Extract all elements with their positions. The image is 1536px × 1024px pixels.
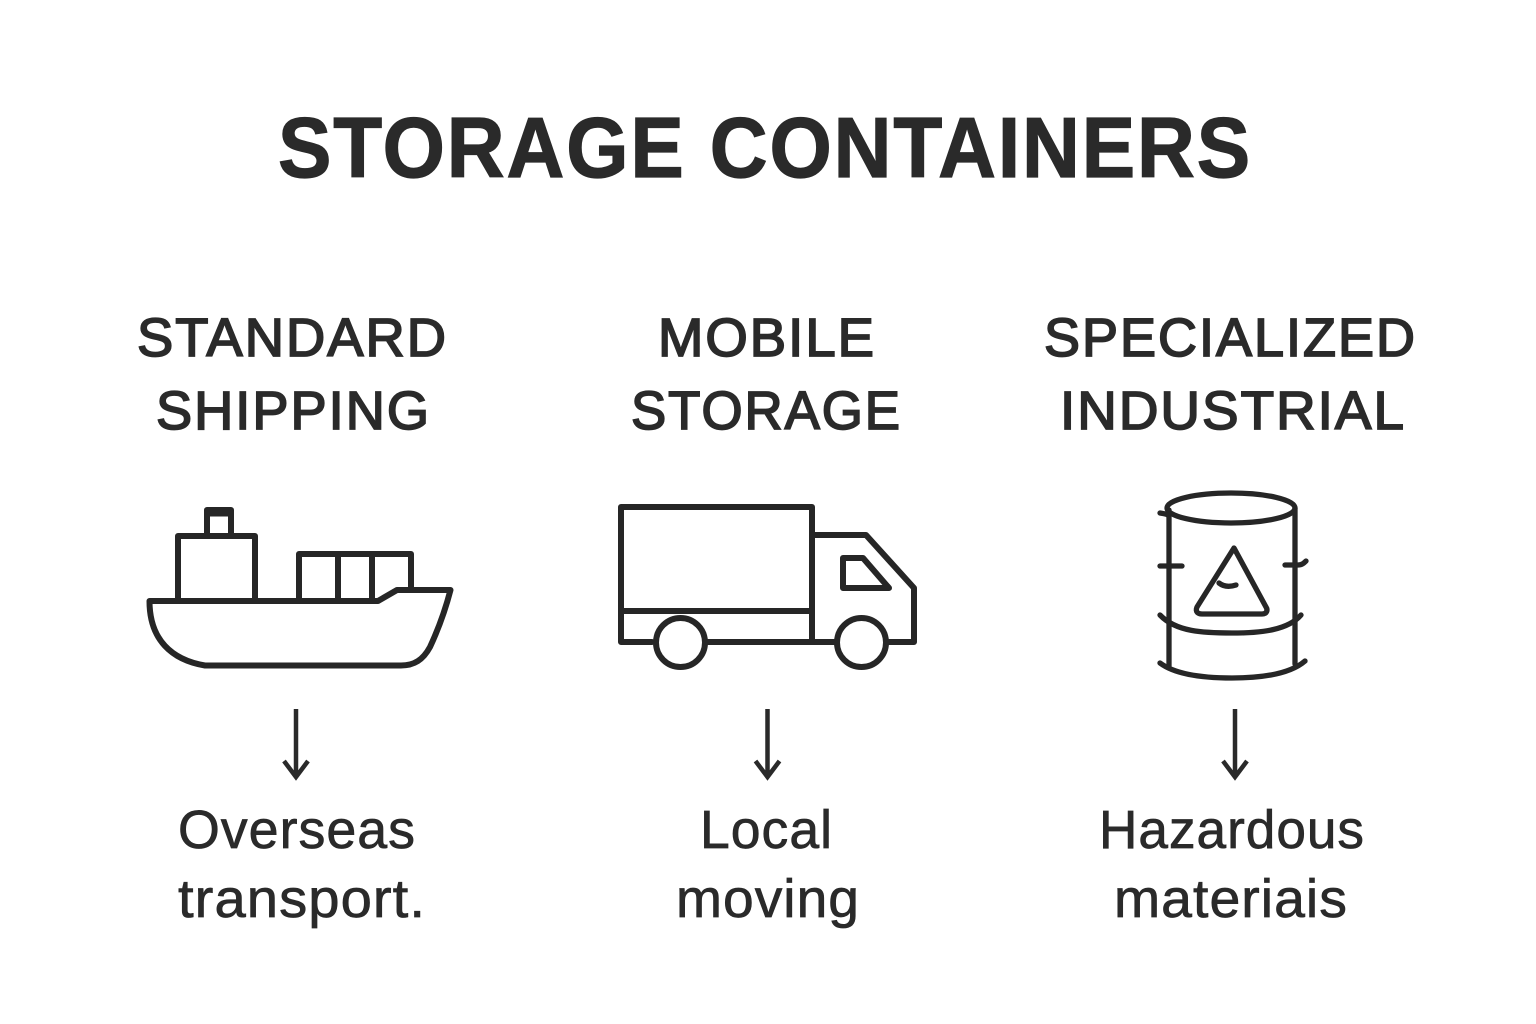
icon: container ship [150,510,450,666]
heading: standard shipping: SHIPPING [156,381,431,441]
text: local moving: moving [676,869,860,929]
heading: mobile storage: MOBILE [658,308,876,368]
panel: mobile storage [621,308,914,929]
arrow: mobile to use [756,709,780,777]
heading: specialized industrial [1044,308,1417,441]
heading: standard shipping: STANDARD [137,308,448,368]
icon: moving truck [621,507,914,667]
arrow: shipping to use [284,709,308,777]
text: hazardous materials: materiais [1114,869,1348,929]
arrow: specialized to use [1223,709,1247,777]
title: STORAGE CONTAINERS [278,101,1252,196]
heading: specialized industrial: INDUSTRIAL [1060,381,1406,441]
icon: hazardous barrel [1160,493,1306,678]
heading: mobile storage [631,308,902,441]
text: local moving [676,800,860,929]
text: overseas transport: transport. [178,869,426,929]
text: overseas transport: Overseas [178,800,416,860]
text: overseas transport [178,800,426,929]
text: hazardous materials: Hazardous [1099,800,1365,860]
panel: standard shipping [137,308,450,929]
text: local moving: Local [700,800,833,860]
heading: standard shipping [137,308,448,441]
heading: mobile storage: STORAGE [631,381,902,441]
panel: specialized industrial [1044,308,1417,929]
text: hazardous materials [1099,800,1365,929]
heading: specialized industrial: SPECIALIZED [1044,308,1417,368]
